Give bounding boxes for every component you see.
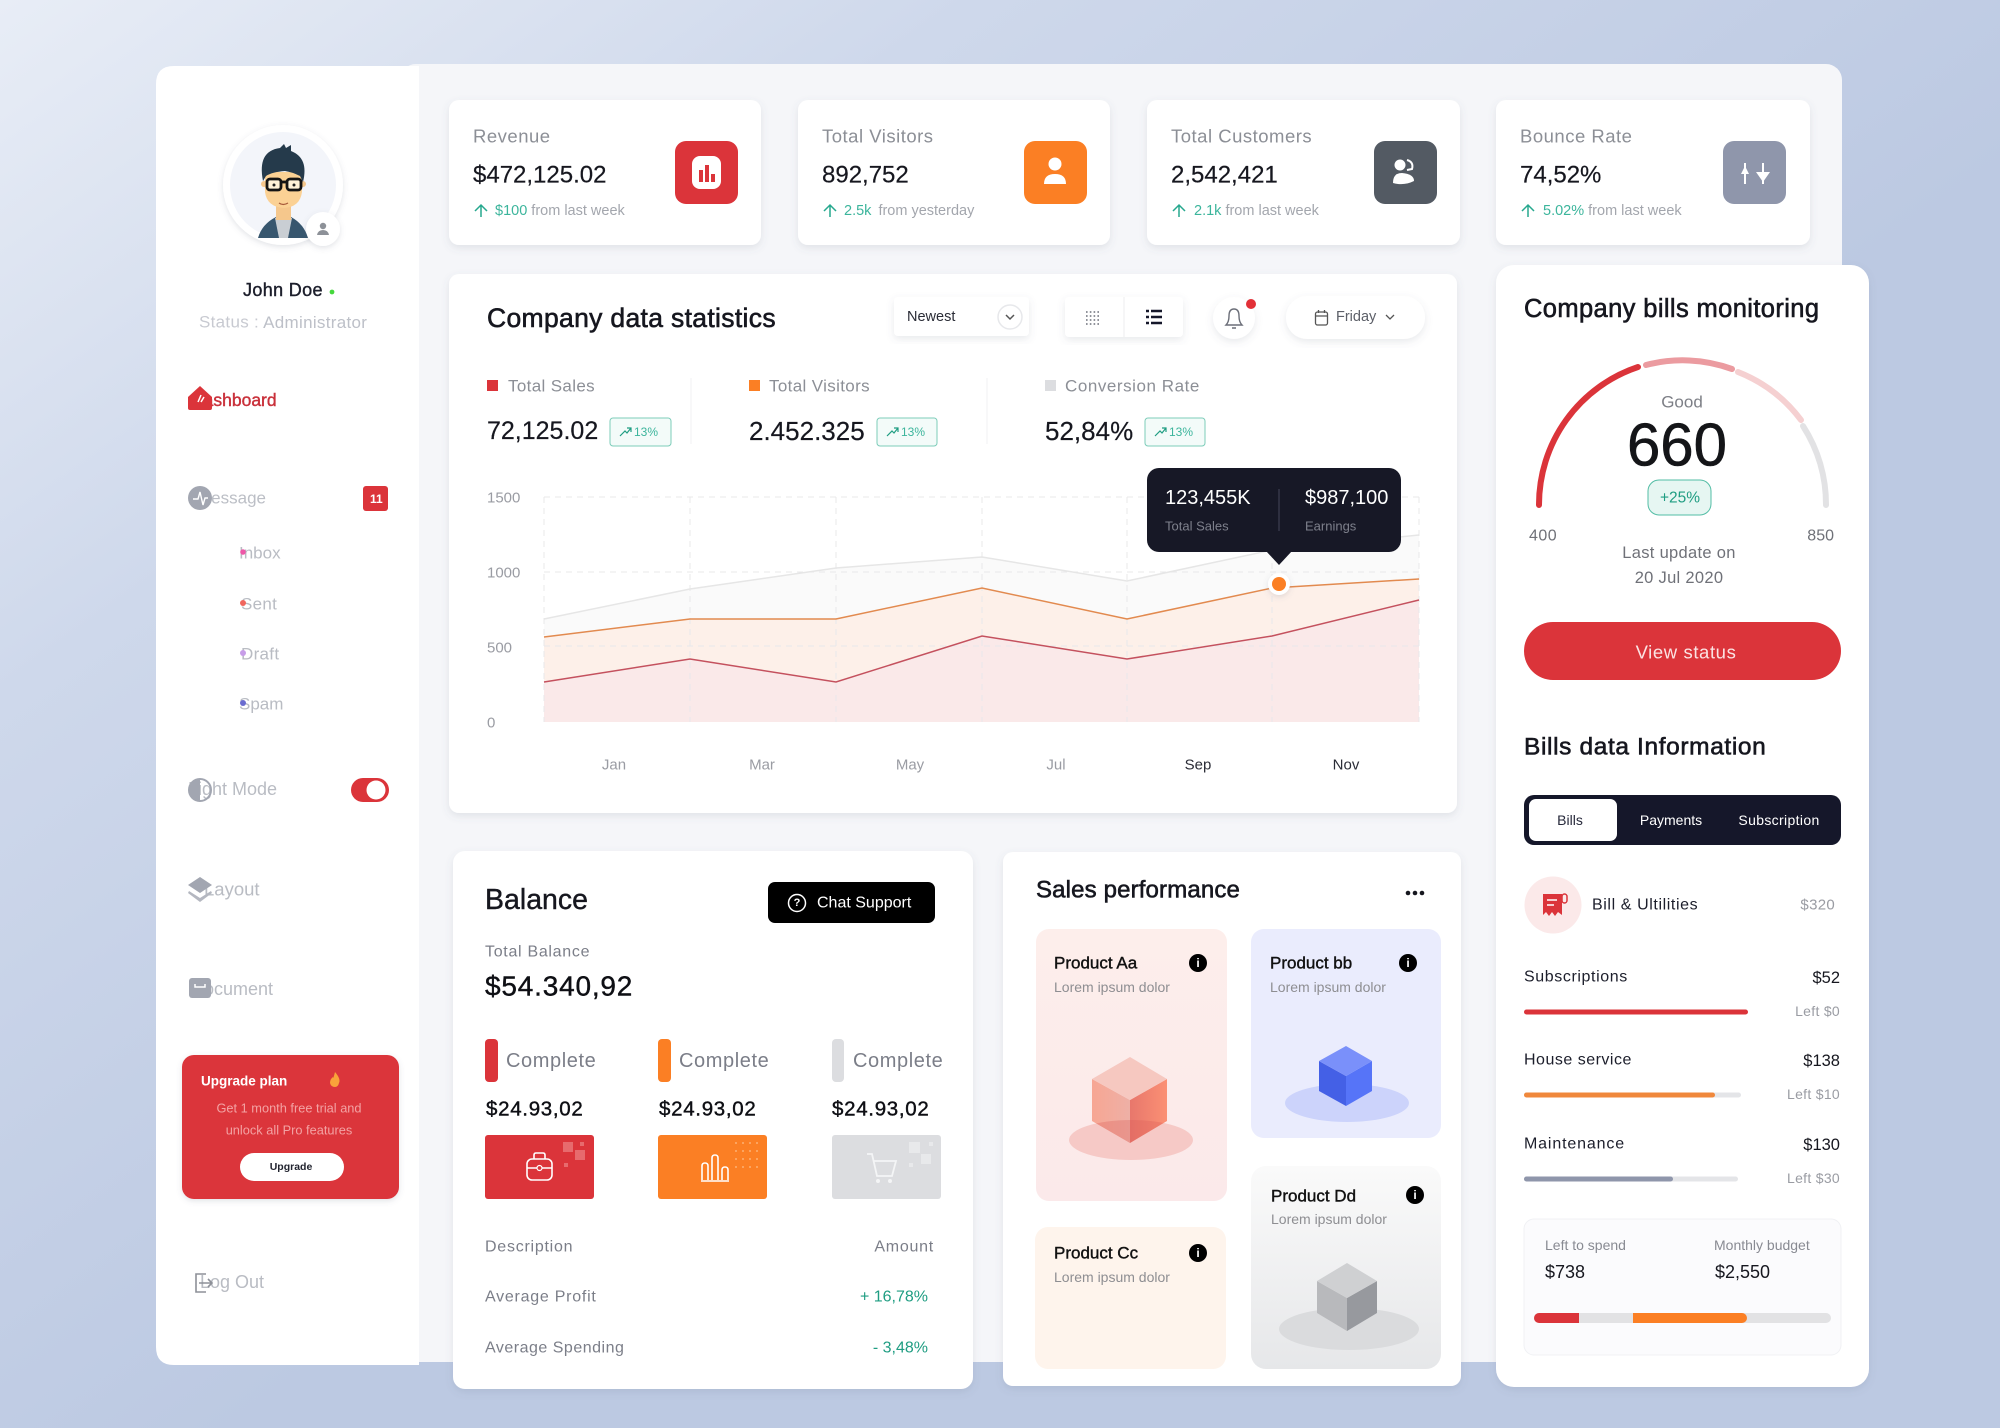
tabs: Payments: [1640, 812, 1702, 828]
chart title: Company data statistics: [487, 303, 776, 333]
nav: light mode: Light Mode: [188, 779, 277, 799]
bills title: Company bills monitoring: [1524, 295, 1819, 323]
sales title: Sales performance: [1036, 876, 1240, 904]
bill item: subscriptions: Left $0: [1795, 1003, 1840, 1019]
nav: log out: Log Out: [200, 1272, 264, 1292]
stat card: total visitors: Total Visitors: [822, 126, 934, 146]
product card: Aa: Lorem ipsum dolor: [1054, 979, 1170, 995]
stat card: revenue: $100 from last week: [495, 203, 626, 219]
gauge: Good: [1661, 392, 1703, 412]
button: view status: View status: [1636, 642, 1736, 662]
balance tile: red: [485, 1039, 596, 1199]
balance tile: gray: [832, 1039, 943, 1199]
legend: conversion rate: 13%: [1169, 425, 1193, 439]
notification bell: [1213, 297, 1256, 339]
product card: Aa: i: [1196, 956, 1200, 970]
nav: dashboard: Dashboard: [191, 390, 277, 410]
balance tile: orange: $24.93,02: [659, 1098, 756, 1120]
product card: Dd: [1251, 1166, 1441, 1369]
nav: inbox: Inbox: [239, 544, 281, 562]
budget box: Monthly budget: [1714, 1237, 1810, 1253]
balance table: - 3,48%: [873, 1340, 928, 1356]
product card: Cc: Lorem ipsum dolor: [1054, 1269, 1170, 1285]
area chart: [487, 490, 1419, 774]
product card: Cc: [1035, 1227, 1226, 1369]
panel: bills: [1496, 265, 1869, 1387]
upgrade card: Upgrade plan: [201, 1074, 287, 1088]
balance tile: gray: Complete: [853, 1050, 943, 1072]
bill item: subscriptions: [1524, 968, 1840, 1019]
gauge: 850: [1807, 528, 1834, 544]
balance tile: orange: [658, 1039, 769, 1199]
product card: Dd: Lorem ipsum dolor: [1271, 1211, 1387, 1227]
bill item: house service: $138: [1803, 1052, 1840, 1070]
view toggle: [1065, 297, 1183, 337]
upgrade card: Get 1 month free trial and: [216, 1100, 362, 1116]
product card: Dd: i: [1413, 1188, 1417, 1202]
stat card: total customers: [1147, 100, 1460, 245]
nav: spam: Spam: [239, 694, 283, 714]
bill item: maintenance: Maintenance: [1524, 1136, 1625, 1152]
tabs: [1524, 795, 1841, 845]
nav: layout: Layout: [204, 878, 260, 900]
balance table: Description: [485, 1238, 573, 1256]
budget box: $2,550: [1715, 1262, 1770, 1282]
gauge: Last update on: [1622, 544, 1736, 562]
area chart: 0: [487, 714, 495, 732]
bill row: Bill & Ultilities: [1592, 896, 1698, 914]
bill item: house service: House service: [1524, 1052, 1632, 1068]
product card: bb: i: [1406, 956, 1410, 970]
nav: message: Message: [197, 488, 266, 508]
legend: total visitors: Total Visitors: [769, 376, 870, 396]
legend: conversion rate: 52,84%: [1045, 416, 1133, 446]
upgrade card: unlock all Pro features: [226, 1122, 352, 1138]
button: view status: [1524, 622, 1841, 680]
bill item: subscriptions: $52: [1812, 969, 1840, 987]
balance table: + 16,78%: [860, 1288, 928, 1306]
stat card: bounce rate: Bounce Rate: [1520, 126, 1632, 146]
bill item: house service: [1524, 1052, 1840, 1102]
legend: conversion rate: Conversion Rate: [1065, 376, 1200, 396]
bills data heading: Bills data Information: [1524, 734, 1766, 760]
legend: total visitors: 13%: [901, 425, 925, 439]
nav: sent: Sent: [241, 594, 277, 614]
budget box: [1524, 1219, 1841, 1355]
gauge: 660: [1627, 412, 1727, 478]
dropdown: newest: [894, 297, 1029, 336]
area chart: 1500: [487, 490, 520, 506]
stat card: revenue: [449, 100, 761, 245]
gauge: 20 Jul 2020: [1635, 569, 1723, 587]
tooltip: Earnings: [1305, 518, 1357, 534]
main content panel: [400, 64, 1842, 1362]
legend: total sales: 72,125.02: [487, 417, 598, 445]
product card: bb: Product bb: [1270, 954, 1352, 972]
stat card: total customers: 2.1k from last week: [1194, 203, 1320, 219]
stat card: bounce rate: 74,52%: [1520, 162, 1601, 188]
upgrade card: Upgrade: [270, 1161, 312, 1173]
avatar: [223, 125, 343, 246]
balance value: $54.340,92: [485, 970, 633, 1002]
panel: sidebar: [156, 66, 419, 1365]
stat card: total customers: 2,542,421: [1171, 162, 1278, 188]
balance tile: gray: $24.93,02: [832, 1098, 930, 1120]
bill item: subscriptions: Subscriptions: [1524, 968, 1628, 986]
stat card: total visitors: 892,752: [822, 162, 909, 188]
date pill: friday: [1286, 296, 1425, 339]
budget box: $738: [1545, 1262, 1585, 1282]
area chart: Nov: [1333, 756, 1360, 774]
tooltip: Total Sales: [1165, 518, 1229, 534]
nav: layout: [188, 877, 260, 902]
product card: Aa: [1036, 929, 1227, 1201]
total balance: Total Balance: [485, 944, 590, 960]
button: chat support: ?: [794, 897, 801, 909]
area chart: 1000: [487, 564, 520, 582]
stat card: bounce rate: [1496, 100, 1810, 245]
stat card: revenue: Revenue: [473, 126, 551, 146]
area chart: Jan: [602, 756, 626, 774]
budget box: Left to spend: [1545, 1237, 1626, 1253]
balance tile: red: $24.93,02: [486, 1098, 584, 1120]
tabs: Subscription: [1738, 812, 1820, 828]
stat card: revenue: $472,125.02: [473, 162, 606, 188]
nav: message: [188, 486, 388, 511]
button: chat support: [768, 882, 935, 923]
stat card: bounce rate: 5.02% from last week: [1543, 203, 1682, 219]
balance title: Balance: [485, 884, 588, 916]
area chart: Jul: [1046, 756, 1066, 774]
tooltip: 123,455K: [1165, 487, 1251, 509]
bill item: maintenance: [1524, 1136, 1840, 1186]
legend: total sales: [487, 376, 671, 446]
user name: John Doe: [243, 280, 323, 300]
dropdown: newest: Newest: [907, 309, 955, 325]
product card: bb: [1251, 929, 1441, 1138]
balance tile: red: Complete: [506, 1050, 596, 1072]
bill row: [1524, 876, 1835, 934]
more menu: [1406, 891, 1424, 895]
nav: document: Document: [191, 979, 273, 999]
nav: message: 11: [370, 492, 383, 506]
bill row: $320: [1800, 896, 1835, 914]
bill item: maintenance: $130: [1803, 1136, 1840, 1154]
legend: total visitors: [749, 376, 937, 446]
product card: Cc: i: [1196, 1246, 1200, 1260]
status dot: [330, 290, 334, 294]
area chart: May: [896, 756, 925, 774]
bill item: maintenance: Left $30: [1787, 1170, 1840, 1186]
tabs: Bills: [1557, 812, 1583, 828]
panel: company data statistics: [449, 274, 1457, 813]
balance tile: orange: Complete: [679, 1050, 769, 1072]
balance table: Amount: [874, 1238, 934, 1256]
upgrade card: [182, 1055, 399, 1199]
gauge: +25%: [1660, 490, 1700, 506]
legend: total sales: 13%: [634, 425, 658, 439]
date pill: friday: Friday: [1336, 309, 1377, 325]
panel: sales performance: [1003, 852, 1461, 1386]
gauge: [1529, 360, 1834, 587]
gauge: 400: [1529, 528, 1557, 544]
button: chat support: Chat Support: [817, 894, 912, 912]
stat card: total visitors: [798, 100, 1110, 245]
panel: balance: [453, 851, 973, 1389]
legend: total sales: Total Sales: [508, 376, 595, 396]
legend: total visitors: 2.452.325: [749, 416, 865, 446]
user status: Status : Administrator: [199, 312, 367, 332]
tooltip: $987,100: [1305, 487, 1388, 509]
product card: Cc: Product Cc: [1054, 1244, 1139, 1262]
area chart: 500: [487, 640, 512, 656]
stat card: total visitors: 2.5k from yesterday: [844, 203, 975, 219]
product card: bb: Lorem ipsum dolor: [1270, 979, 1386, 995]
area chart: Sep: [1185, 756, 1211, 774]
product card: Aa: Product Aa: [1054, 954, 1138, 972]
product card: Dd: Product Dd: [1271, 1186, 1356, 1206]
tooltip: [1147, 468, 1401, 565]
area chart: Mar: [749, 756, 775, 774]
balance table: Average Profit: [485, 1288, 597, 1306]
balance table: [485, 1238, 934, 1356]
balance table: Average Spending: [485, 1340, 624, 1356]
nav: light mode: [188, 778, 389, 802]
nav: draft: Draft: [241, 644, 279, 664]
stat card: total customers: Total Customers: [1171, 126, 1312, 146]
bill item: house service: Left $10: [1787, 1086, 1840, 1102]
legend: conversion rate: [1045, 376, 1205, 446]
